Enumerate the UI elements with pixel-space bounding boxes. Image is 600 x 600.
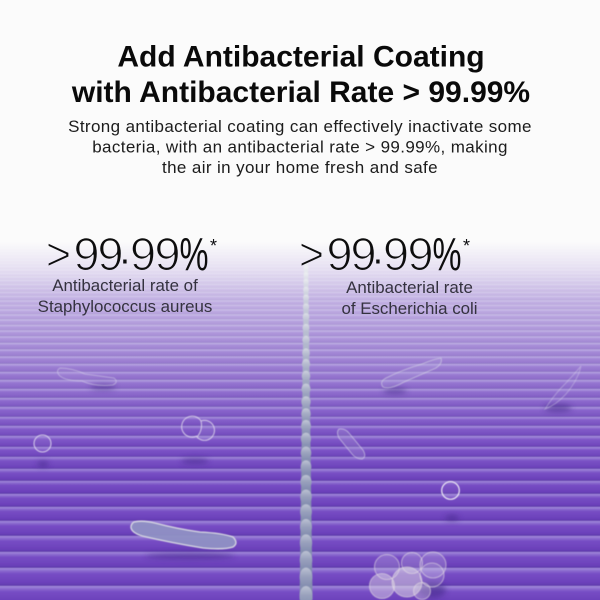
stat: e. coli rate xyxy=(299,228,470,284)
bacteria shadows xyxy=(37,384,572,598)
stat: staphylococcus rate: 9 xyxy=(98,228,124,280)
stat: staphylococcus rate: > xyxy=(46,228,71,280)
bacterium: large rod xyxy=(131,521,236,549)
bacterium: dividing coccus xyxy=(182,416,214,440)
stat: e. coli rate: 9 xyxy=(326,228,352,280)
bacterium: thin rod far right xyxy=(545,366,581,409)
stat: e. coli rate: · xyxy=(370,232,386,284)
stat: e. coli rate: > xyxy=(299,228,324,280)
stat: e. coli rate: 9 xyxy=(408,228,434,280)
title xyxy=(71,40,530,109)
label: staphylococcus: Staphylococcus aureus xyxy=(38,297,212,316)
bacterium: rod upper left xyxy=(58,368,116,386)
subtitle text: the air in your home fresh and safe xyxy=(162,158,438,177)
stat: e. coli rate: 9 xyxy=(383,228,409,280)
label: e. coli: Antibacterial rate xyxy=(346,278,473,297)
bacterium: coccus right xyxy=(442,482,459,499)
bacterium: coccus cluster xyxy=(370,552,446,600)
bacterium: rod upper right xyxy=(382,358,441,388)
stat: e. coli rate: * xyxy=(463,236,470,256)
panel: striped purple coating xyxy=(0,230,600,600)
label: e. coli: of Escherichia coli xyxy=(341,299,478,318)
stat: staphylococcus rate: 9 xyxy=(154,228,180,280)
title: Add Antibacterial Coating xyxy=(117,40,485,74)
title: with Antibacterial Rate > 99.99% xyxy=(71,76,530,109)
label: staphylococcus: Antibacterial rate of xyxy=(52,276,198,295)
label: staphylococcus xyxy=(38,276,212,316)
subtitle text: bacteria, with an antibacterial rate > 99.99%, making xyxy=(92,138,508,156)
stat: staphylococcus rate: · xyxy=(117,232,133,284)
stat: staphylococcus rate: 9 xyxy=(130,228,156,280)
stat: e. coli rate: 9 xyxy=(350,228,376,280)
bacterium: short rod xyxy=(338,429,365,459)
stat: staphylococcus rate: % xyxy=(180,228,208,280)
subtitle text: Strong antibacterial coating can effectively inactivate some xyxy=(68,117,532,136)
stat: staphylococcus rate xyxy=(46,228,217,284)
subtitle text xyxy=(68,117,532,177)
label: e. coli xyxy=(341,278,478,318)
central bead column xyxy=(300,262,313,600)
stat: e. coli rate: % xyxy=(432,228,462,280)
stat: staphylococcus rate: 9 xyxy=(74,228,100,280)
white fade over coating xyxy=(0,215,600,600)
bacterium: coccus left xyxy=(34,435,51,452)
stat: staphylococcus rate: * xyxy=(210,236,217,256)
